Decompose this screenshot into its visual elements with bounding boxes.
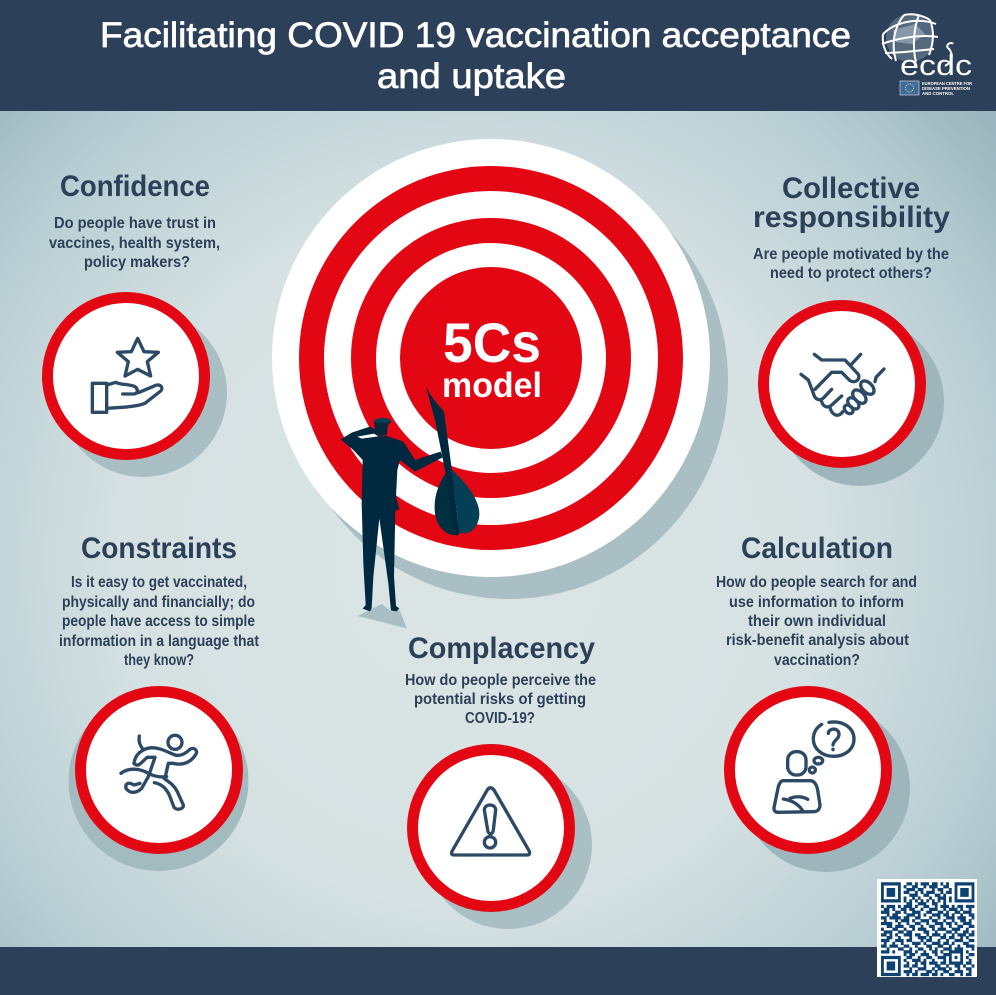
text: constraints: they know?: [124, 652, 194, 669]
text: calculation: vaccination?: [774, 652, 860, 669]
icon: warning triangle: [407, 744, 592, 929]
text: calculation: How do people search for and: [716, 574, 917, 591]
text: confidence: [49, 215, 220, 271]
text: complacency: potential risks of getting: [414, 691, 586, 708]
text: constraints: physically and financially; do: [62, 594, 255, 611]
text: complacency: How do people perceive the: [405, 672, 596, 689]
logo: ecdc: EUROPEAN CENTRE FOR: [922, 81, 973, 86]
text: calculation: their own individual: [748, 613, 886, 630]
text: confidence: policy makers?: [84, 254, 190, 271]
title: Facilitating COVID 19 vaccination acceptance: [100, 16, 851, 55]
heading: calculation: Calculation: [741, 532, 893, 565]
title: [100, 16, 851, 96]
text: calculation: risk-benefit analysis about: [726, 632, 909, 649]
text: collective responsibility: Are people motivated by the: [753, 246, 949, 263]
icon: runner: [68, 686, 248, 871]
panel: calculation: [716, 532, 917, 872]
5Cs label: 5Cs: [443, 311, 541, 374]
text: constraints: people have access to simple: [62, 613, 255, 630]
man holding dart: [341, 387, 479, 628]
text: confidence: Do people have trust in: [54, 215, 216, 232]
text: confidence: vaccines, health system,: [49, 235, 220, 252]
panel: constraints: [59, 532, 259, 871]
target: 5Cs model: [272, 139, 728, 599]
panel: confidence: [42, 170, 227, 477]
QR code: [877, 879, 977, 977]
logo: ecdc: [882, 14, 973, 96]
heading: collective responsibility: [753, 172, 950, 234]
title: and uptake: [377, 57, 566, 96]
heading: collective responsibility: Collective: [782, 172, 920, 205]
footer band: [0, 947, 996, 995]
heading: constraints: Constraints: [81, 532, 237, 565]
heading: collective responsibility: responsibility: [753, 201, 950, 234]
logo: ecdc: DISEASE PREVENTION: [922, 86, 970, 91]
text: calculation: use information to inform: [729, 594, 904, 611]
text: complacency: COVID-19?: [465, 710, 535, 727]
heading: confidence: Confidence: [60, 170, 210, 203]
model label: model: [442, 366, 542, 405]
text: constraints: [59, 574, 259, 669]
text: complacency: [405, 672, 596, 727]
icon: handshake: [758, 300, 944, 486]
text: collective responsibility: [753, 246, 949, 282]
icon: person thinking: [724, 686, 910, 872]
panel: complacency: [405, 632, 596, 929]
heading: complacency: Complacency: [408, 632, 595, 665]
text: constraints: information in a language that: [59, 633, 259, 650]
text: constraints: Is it easy to get vaccinated,: [71, 574, 247, 591]
logo: ecdc: AND CONTROL: [922, 91, 954, 96]
logo: ecdc: ecdc: [900, 50, 972, 82]
icon: hand with star: [42, 292, 227, 477]
panel: collective responsibility: [753, 172, 950, 486]
header band: [0, 0, 996, 111]
text: calculation: [716, 574, 917, 669]
text: collective responsibility: need to protect others?: [770, 265, 932, 282]
